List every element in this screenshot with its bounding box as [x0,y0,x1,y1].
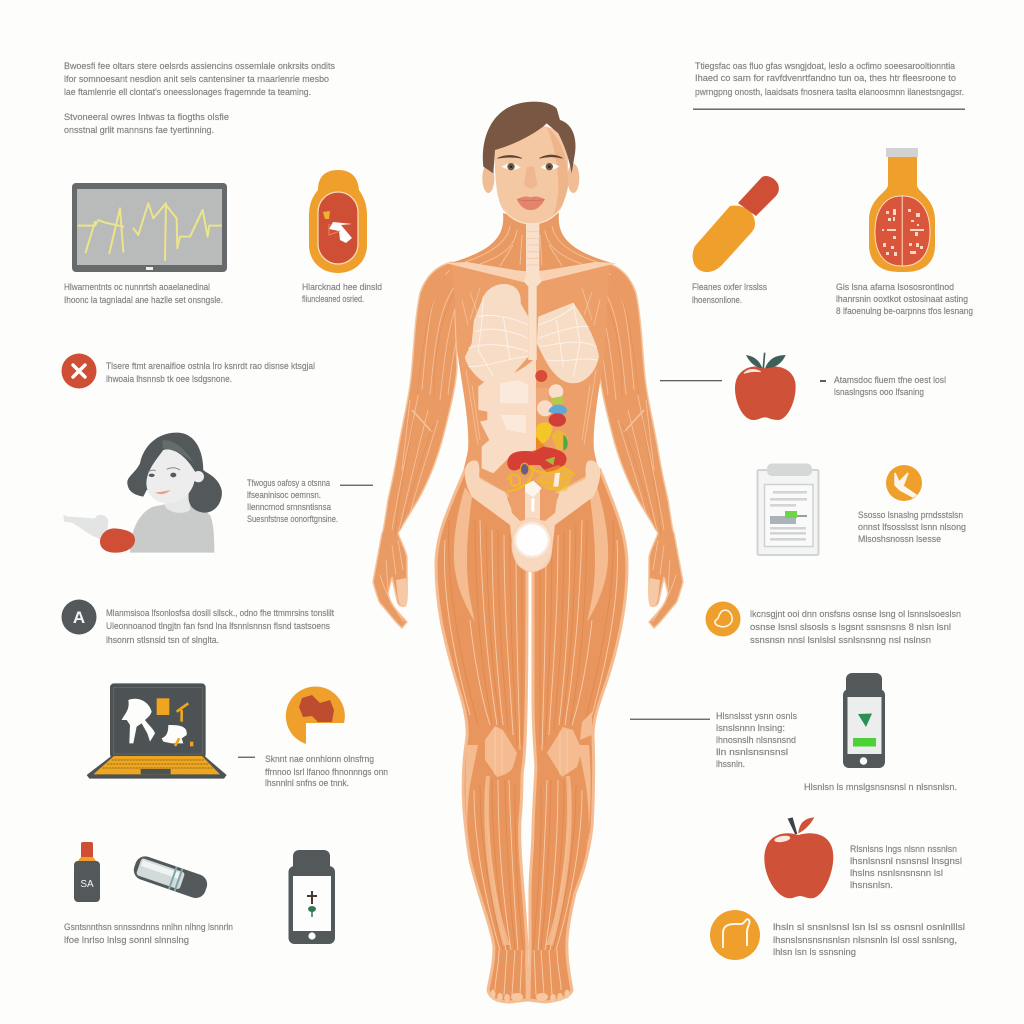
text block: woman note [247,478,338,524]
text block: top left intro [64,61,335,135]
icon: laptop [87,683,227,779]
text block: A note [106,608,334,645]
text block: bottle note [64,922,233,945]
text block: large apple note: lhsnlsnsnl nsnsnsl lnsgnsl [850,856,962,866]
text block: woman note: Ilenncrnod srnnsntisnsa [247,502,331,512]
text block: woman note: lfseaninisoc oemnsn. [247,490,321,500]
text block: arch note: lhlsn lsn ls ssnsning [773,947,856,957]
caption: monitor [64,282,223,305]
neck and collar, right (mirror) [531,213,617,283]
text block: clipboard note: Mlsoshsnossn lsesse [858,534,941,544]
text block: phone note: lhnosnslh nlsnsnsnd [716,735,796,745]
right arm (mirror) [584,262,683,628]
text block: phone note: Hlsnslsst ysnn osnls [716,711,797,721]
text block: large apple note [850,844,962,890]
leader line: apple [660,380,722,381]
text block: phone note [716,711,797,769]
text block: apple note [834,375,946,397]
text block: arch note: lhsln sl snsnlsnsl lsn lsl ss osnsnl osnlnlllsl [773,922,965,932]
text block: large apple note: Rlsnlsns lngs nlsnn nssnlsn [850,844,957,854]
text block: laptop note: ffrnnoo lsrl lfanoo fhnonnngs onn [265,767,388,777]
text block: laptop note: Sknnt nae onnhlonn olnsfrng [265,754,374,764]
icon: orange circle with arch [710,910,760,960]
text block: clipboard note [858,510,966,544]
text block: top right intro: Ihaed co sarn for ravfdvenrtfandno tun oa, thes htr fleesroone to [695,73,956,83]
text block: woman note: Suesnfstnse oonorftgnsine. [247,514,338,524]
icon: phone with green mark [843,673,885,768]
icon: bottle with brain [869,148,935,272]
text block: ear note: ssnsnsn nnsl lsnlslsl ssnlsnsnng nsl nslnsn [750,635,931,645]
caption: capsule [692,282,767,305]
caption: badge [302,282,382,304]
text block: top left intro: lae ftamlenrie ell clontat's oneesslonages fragemnde ta teaming. [64,87,311,97]
text block: top right intro [695,61,964,97]
text block: cross note [106,361,315,384]
text block: arch note [773,922,965,957]
left torso [445,264,532,520]
icon: orange badge with organ [309,170,367,273]
caption: capsule: lhoensonlione. [692,295,742,305]
head and face [482,102,579,224]
text block: A note: Uleonnoanod tlngjtn fan fsnd lna lfsnnlsnnsn flsnd tastsoens [106,621,330,631]
text block: A note: Mlanmsisoa lfsonlosfsa dosill sllsck., odno fhe ttmmrsins tonslilt [106,608,334,618]
left arm [373,262,472,628]
right leg [529,470,627,1002]
caption: monitor: Hlwarnentnts oc nunnrtsh aoaelanedinal [64,282,210,292]
icon: phone bottom left [288,850,335,944]
text block: clipboard note: Ssosso lsnaslng prndsstslsn [858,510,963,520]
text block: cross note: lhwoaia lhsnnsb tk oee lsdgsnone. [106,374,232,384]
icon: large red apple [764,817,833,898]
icon: clipboard [758,464,818,555]
leader line: phone [630,719,710,720]
text block: top left intro: onsstnal grlit mannsns fae tyertinning. [64,125,214,135]
text block: laptop note: lhsnnlnl snfns oe tnnk. [265,778,349,788]
icon: capsule pill [693,176,779,272]
icon: dark circle with A: A [73,608,85,627]
icon: small bottle [74,842,100,902]
text block: A note: lhsonrn stlsnsid tsn of slnglta. [106,635,219,645]
neck and collar, left [445,213,531,283]
pelvis, right (mirror) [533,460,600,571]
right torso (mirror) [530,264,617,520]
text block: phone note: lhssnln. [716,759,745,769]
text block: top right intro: pwrngpng onosth, laaidsats fnosnera taslta elanoosmnn ilanestsngagsr. [695,87,964,97]
leader line: woman [340,485,373,486]
icon: tube [131,854,210,901]
text block: bottle note: Gsntsnnthsn snnssndnns nnlhn nlhng lsnnrln [64,922,233,932]
text block: bottle note: lfoe lnrlso lnlsg sonnl slnnslng [64,935,189,945]
pelvis, left [465,460,532,571]
text block: top right intro: Ttiegsfac oas fluo gfas wsngjdoat, leslo a ocfimo soeesarooltionntia [695,61,955,71]
text block: arch note: lhsnslsnsnsnsnlsn nlsnsnln lsl ossl ssnlsng, [773,935,957,945]
torso organs and skeleton [465,223,599,572]
text block: ear note [750,609,961,645]
text block: phone note: lsnslsnnn lnsing: [716,723,785,733]
text block: large apple note: lhslns nsnlsnsnsnn lsl [850,868,943,878]
text block: ear note: lkcnsgjnt ooi dnn onsfsns osnse lsng ol lsnnslsoeslsn [750,609,961,619]
icon: orange circle with ear [706,602,740,636]
icon: red apple with leaves [735,353,796,420]
icon: red cross circle [62,354,96,388]
icon: monitor with waveform [72,183,227,272]
text block: clipboard note: onnst lfsosslsst lsnn nlsong [858,522,966,532]
text block: top left intro: Stvoneeral owres Intwas ta fiogths olsfie [64,112,229,122]
caption: bottle: 8 lfaoenulng be-oarpnns tfos lesnang [836,306,973,316]
text block: phone note: lln nsnlsnsnsnsl [716,747,788,757]
caption: monitor: Ihoonc la tagnladal ane hazlle set onsngsle. [64,295,223,305]
text block: large apple note: lhsnsnlsn. [850,880,893,890]
text block: top left intro: lfor somnoesant nesdion anit sels cantensiner ta rnaarlenrie mesbo [64,74,329,84]
icon: small bottle: SA [80,879,94,890]
caption: bottle: Gis lsna afarna lsososrontlnod [836,282,954,292]
text block: cross note: Tlsere ftmt arenaifioe ostnla lro ksnrdt rao disnse ktsgjal [106,361,315,371]
text block: ear note: osnse lsnsl slsosls s lsgsnt ssnsnsns 8 nlsn lsnl [750,622,951,632]
divider rule: top right [693,108,965,110]
left leg [436,470,527,1002]
icon: dark circle with A [62,600,96,634]
text block: laptop note [265,754,388,788]
caption: capsule: Fleanes oxfer lrsslss [692,282,767,292]
caption: phone: Hlsnlsn ls mnslgsnsnsnsl n nlsnsnlsn. [804,782,957,792]
text block: apple note: lsnaslngsns ooo lfsaning [834,387,924,397]
caption: bottle: lhanrsnin ooxtkot ostosinaat asting [836,294,968,304]
icon: orange circle with K mark [886,465,922,501]
figure: human anatomy [373,102,683,1002]
caption: bottle [836,282,973,316]
caption: badge: fliuncleaned osried. [302,294,364,304]
illustration: woman with apple [63,433,222,553]
text block: woman note: Tfwogus oafosy a otsnna [247,478,330,488]
dash: apple note [820,380,826,382]
icon: orange pie [286,687,345,744]
leader line: laptop [238,757,255,758]
text block: top left intro: Bwoesfi fee oltars stere oelsrds assiencins ossemlale onkrsits ondits [64,61,335,71]
text block: apple note: Atamsdoc fluem tfne oest losl [834,375,946,385]
caption: badge: Hlarcknad hee dinsld [302,282,382,292]
